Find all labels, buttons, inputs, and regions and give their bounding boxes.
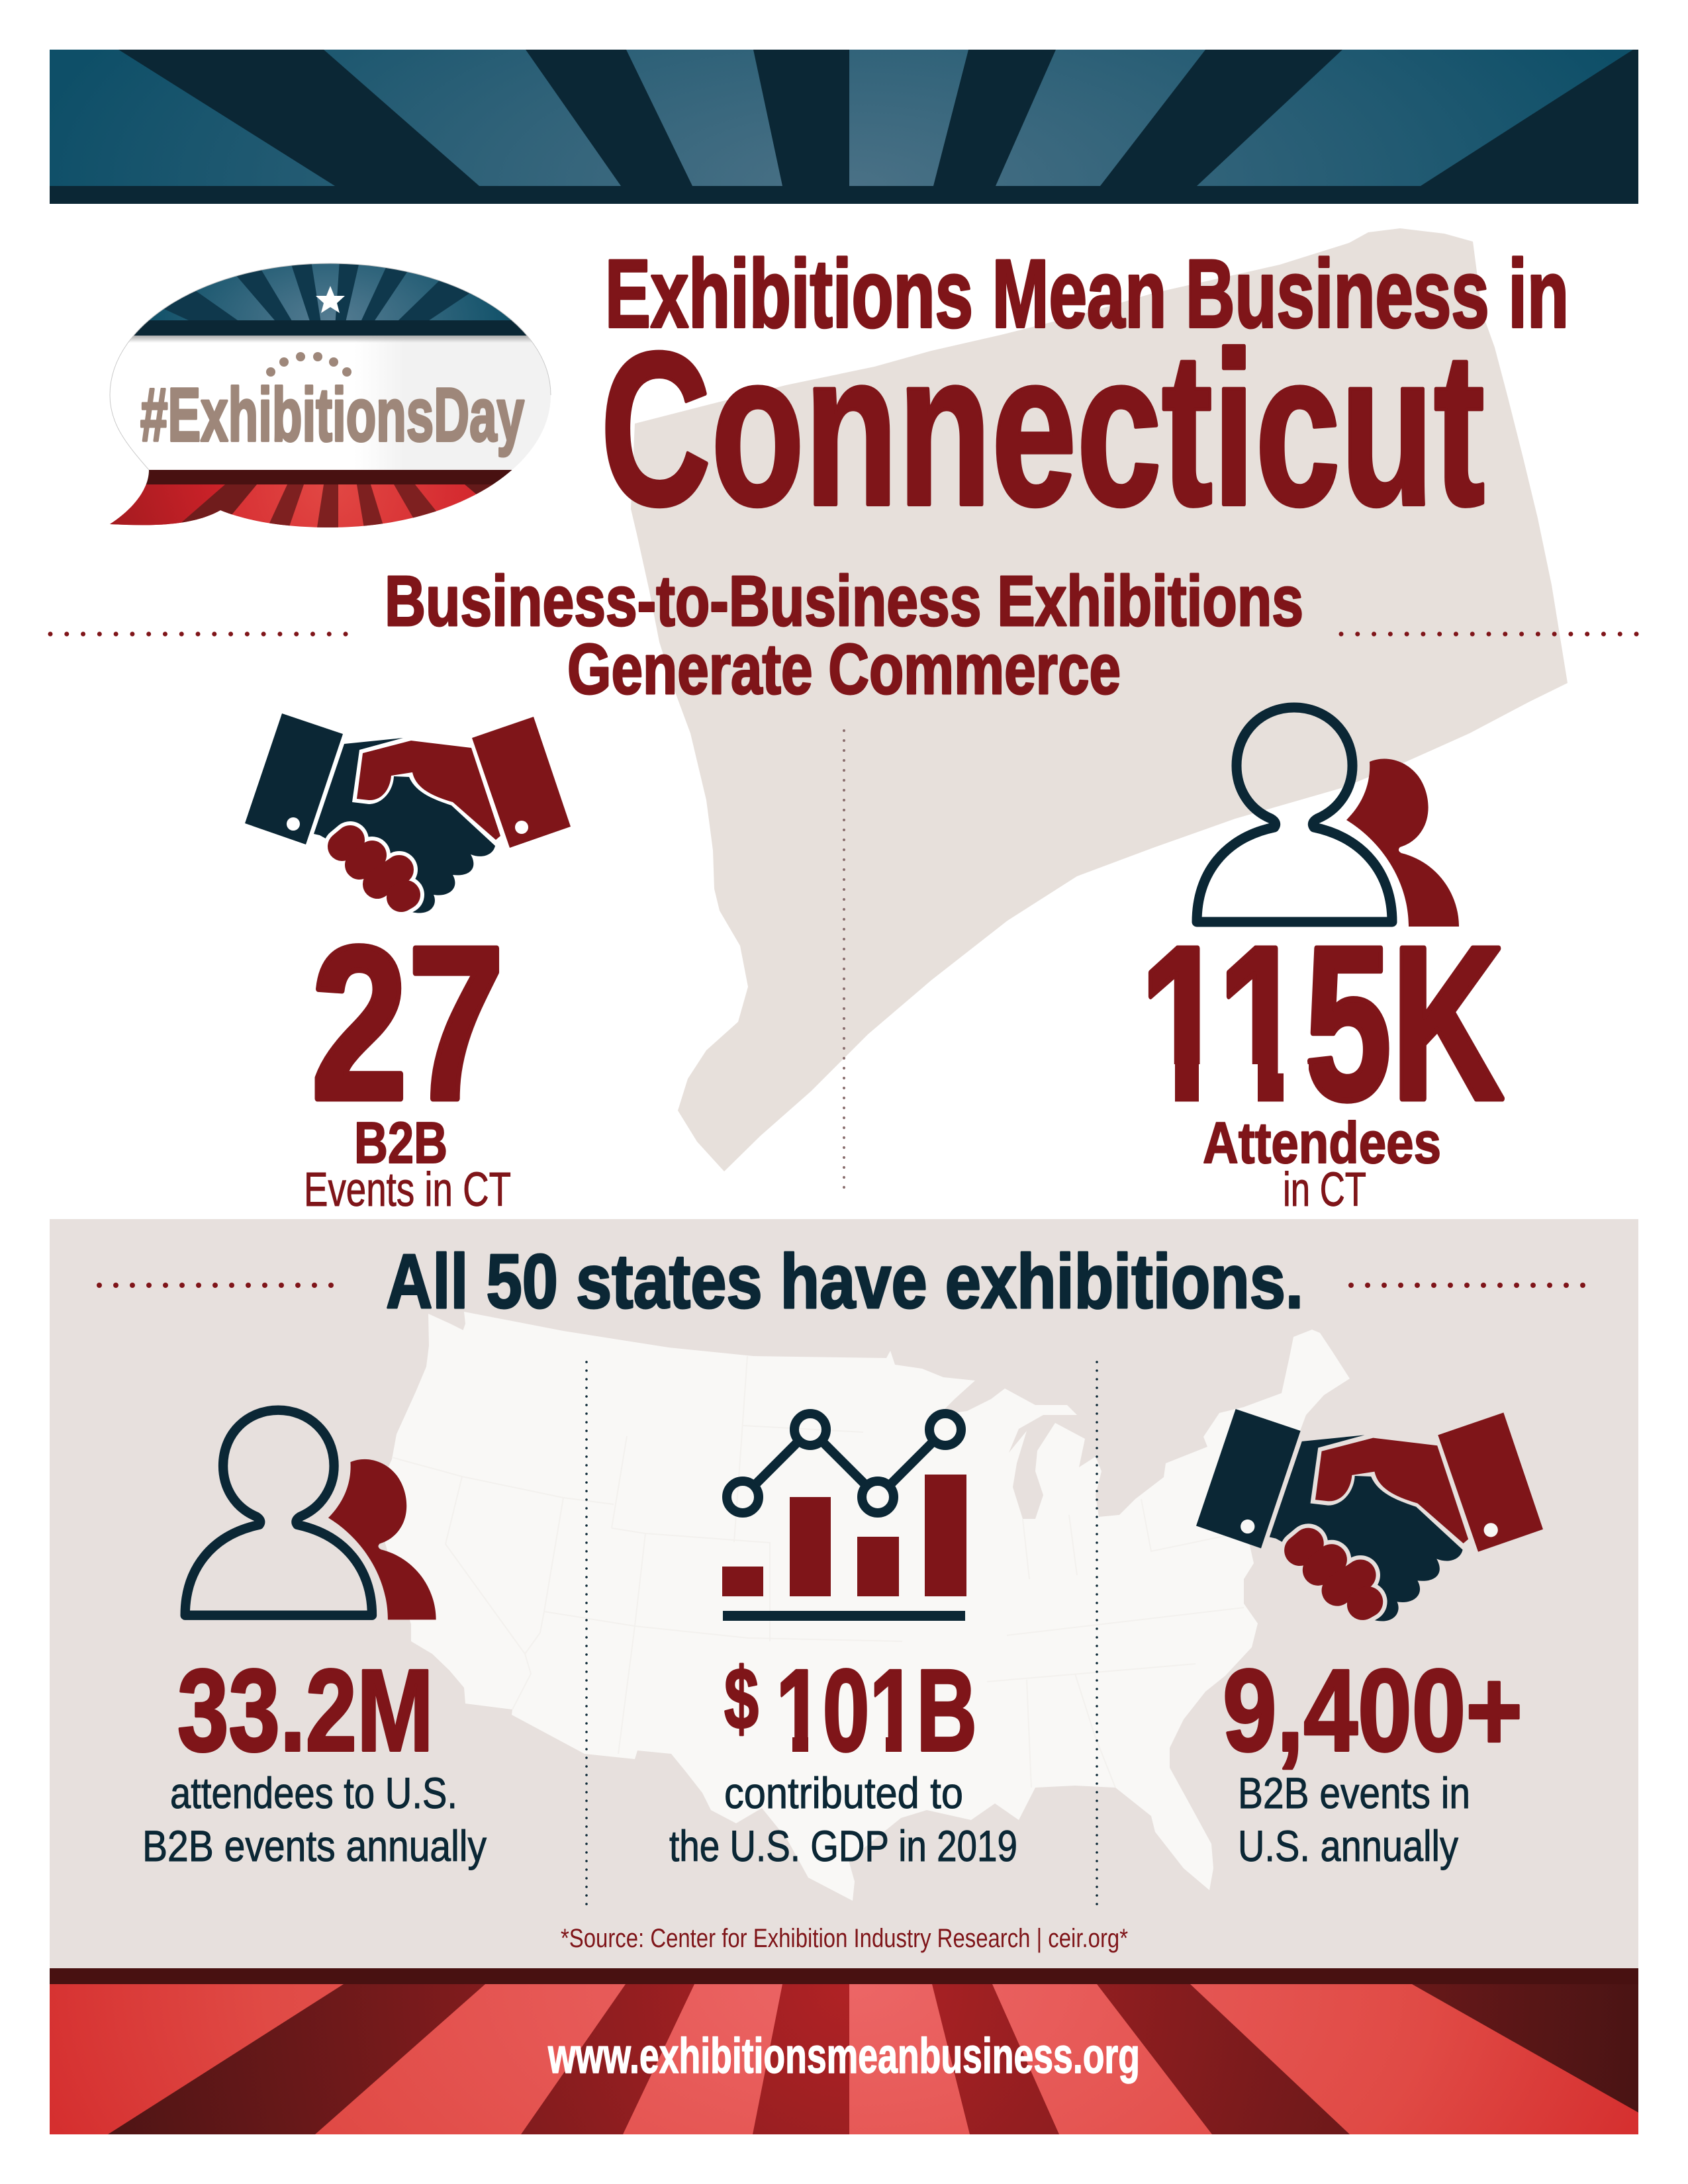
speech bubble logo: #ExhibitionsDay	[110, 263, 551, 527]
website URL: www.exhibitionsmeanbusiness.org	[547, 2028, 1140, 2083]
panel divider right	[1096, 1362, 1098, 1908]
stat: 33.2M attendees: attendees to U.S.	[170, 1768, 457, 1817]
stat: $101B GDP: contributed to	[724, 1768, 963, 1817]
US map silhouette	[377, 1312, 1350, 1901]
icon: people	[1197, 707, 1459, 927]
Connecticut state silhouette	[631, 228, 1568, 1171]
stat: 115K attendees: in CT	[1283, 1163, 1366, 1216]
icon: handshake panel	[1196, 1409, 1543, 1621]
bottom sunburst banner	[50, 1968, 1638, 2134]
stat: 27 B2B events: 27	[311, 901, 504, 1145]
stat: 27 B2B events: B2B	[354, 1110, 447, 1175]
icon: people panel	[185, 1410, 436, 1619]
stat: 9,400+ events: B2B events in	[1238, 1768, 1470, 1817]
stat: 9,400+ events	[1223, 1646, 1523, 1870]
logo hashtag text: #ExhibitionsDay	[140, 373, 524, 457]
stat: 33.2M attendees: B2B events annually	[142, 1821, 487, 1870]
dotted rule panel right	[1351, 1283, 1586, 1288]
source note: *Source: Center for Exhibition Industry Research | ceir.org*	[561, 1924, 1128, 1953]
dotted rule panel left	[99, 1283, 334, 1288]
top sunburst banner	[50, 50, 1638, 204]
dotted rule right	[1341, 631, 1637, 637]
logo arc of dots	[266, 352, 352, 377]
stat: 115K attendees	[1140, 901, 1504, 1216]
dotted rule left	[50, 631, 346, 637]
stat: 33.2M attendees	[142, 1646, 487, 1870]
stat: $101B GDP	[669, 1646, 1017, 1870]
stat: 9,400+ events: 9,400+	[1223, 1646, 1523, 1776]
icon: bar and line chart	[722, 1414, 966, 1621]
center dotted divider	[843, 731, 845, 1188]
panel divider left	[585, 1362, 588, 1908]
stat: $101B GDP: the U.S. GDP in 2019	[669, 1821, 1017, 1870]
stat: 9,400+ events: U.S. annually	[1238, 1821, 1458, 1870]
stat: 27 B2B events	[304, 901, 511, 1216]
section heading: all 50 states: All 50 states have exhibitions.	[386, 1238, 1303, 1324]
stat: $101B GDP: $	[724, 1650, 759, 1747]
icon: handshake	[245, 713, 571, 913]
stat: 115K attendees: Attendees	[1203, 1110, 1441, 1175]
stat: 27 B2B events: Events in CT	[304, 1163, 511, 1216]
stat: 33.2M attendees: 33.2M	[177, 1646, 434, 1776]
panel: all 50 states	[50, 1219, 1638, 1968]
logo star	[316, 286, 345, 313]
stat: 115K attendees: 115K	[1140, 901, 1504, 1145]
section heading: B2B exhibitions	[385, 561, 1303, 709]
section heading: B2B exhibitions: Business-to-Business Exhibitions	[385, 561, 1303, 641]
section heading: B2B exhibitions: Generate Commerce	[567, 629, 1121, 709]
stat: $101B GDP: 101B	[776, 1646, 977, 1776]
